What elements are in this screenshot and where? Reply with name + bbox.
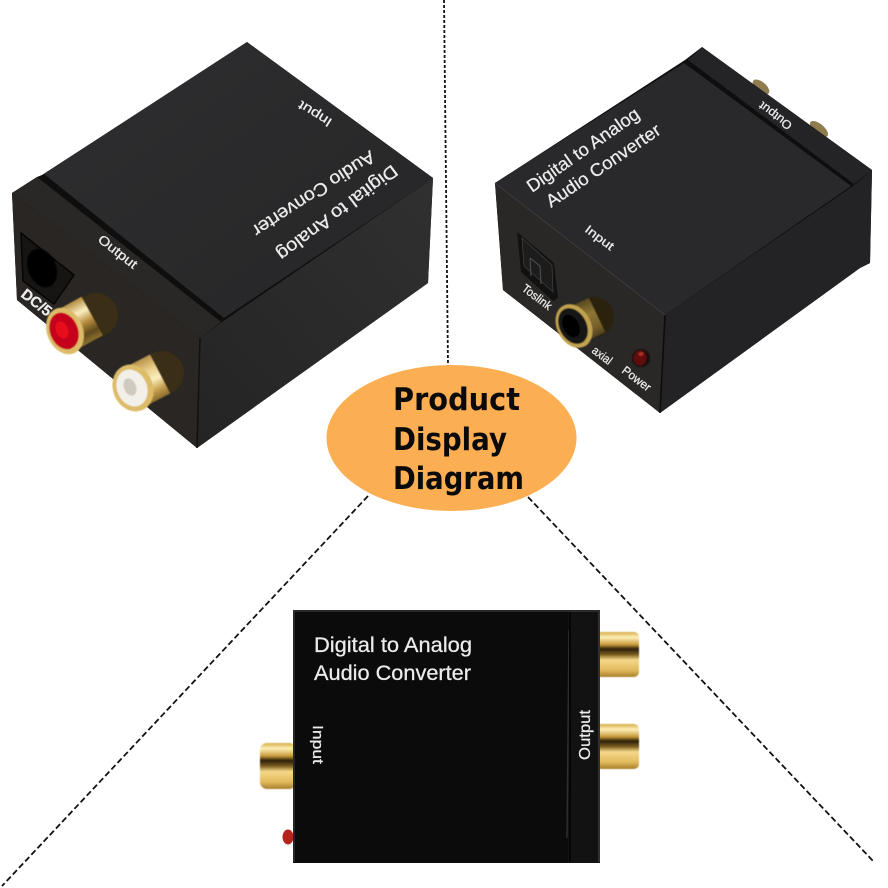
label: Power: Power (619, 363, 654, 394)
label: Output: Output (755, 98, 795, 133)
title: Product Display Diagram: Display (393, 422, 507, 458)
label: Output: Output (577, 709, 594, 760)
center badge (326, 365, 576, 511)
silhouette base (12, 42, 433, 448)
output RCA barrel lower (596, 724, 639, 769)
label: Audio Converter: Audio Converter (314, 662, 471, 685)
DC power recess (21, 233, 74, 304)
dashed connector: top vertical (444, 0, 448, 366)
gold jack behind strip, lower (807, 118, 831, 140)
label: Input: Input (309, 725, 326, 765)
title: Product Display Diagram (393, 382, 524, 497)
product view: output side, left device (12, 42, 433, 448)
product view: top down, lower device (260, 610, 639, 863)
output strip (568, 610, 600, 863)
label: Digital to Analog: Digital to Analog (273, 161, 402, 265)
label: Input: Input (295, 98, 335, 130)
title: Product Display Diagram: Diagram (393, 461, 524, 497)
orange ellipse (326, 365, 576, 511)
output strip top (12, 177, 221, 338)
title: Product Display Diagram: Product (393, 382, 520, 418)
white RCA jack (105, 358, 162, 418)
product view: input side, right device (495, 47, 872, 413)
right side face (660, 170, 872, 413)
silhouette base (495, 47, 872, 413)
gold jack behind strip, upper (750, 77, 772, 97)
output RCA barrel upper (596, 632, 639, 677)
dashed connector: lower right (528, 497, 874, 862)
output strip (688, 47, 872, 184)
label: Audio Converter: Audio Converter (249, 147, 379, 241)
label: Audio Converter: Audio Converter (542, 120, 664, 211)
toslink port (517, 232, 558, 301)
power LED (632, 349, 650, 367)
top face (44, 42, 433, 318)
front face (495, 183, 665, 413)
input RCA barrel (260, 743, 296, 789)
top face (495, 63, 851, 315)
label: Digital to Analog: Digital to Analog (314, 634, 472, 657)
red power LED (282, 830, 294, 844)
front face below strip (12, 193, 200, 448)
label: Output: Output (95, 232, 141, 272)
red RCA jack (39, 302, 96, 360)
dashed connector: lower left (2, 496, 368, 886)
label: Toslink: Toslink (519, 281, 556, 313)
label: Input: Input (582, 222, 618, 254)
label: Coaxial: axial (589, 343, 615, 368)
label: Digital to Analog: Digital to Analog (523, 104, 643, 196)
right side face (197, 178, 433, 448)
housing (293, 610, 600, 863)
coaxial RCA jack (548, 298, 600, 354)
label: DC/5V: DC/5 (18, 286, 55, 320)
